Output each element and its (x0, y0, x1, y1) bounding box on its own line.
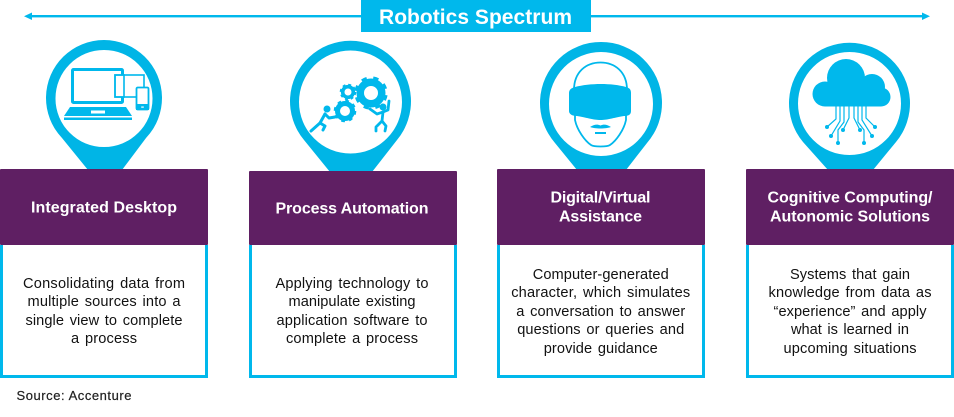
icon: people pushing gears (311, 76, 389, 131)
heading: process automation: Process Automation (276, 200, 428, 217)
large gear (354, 76, 388, 110)
panel: integrated desktop (0, 40, 208, 377)
icon: cloud with circuits (812, 59, 890, 145)
description: process automation: manipulate existing (288, 294, 416, 310)
body box: process automation (250, 245, 456, 376)
panel: cognitive computing (746, 43, 954, 377)
description: integrated desktop (23, 276, 185, 347)
body box: cognitive computing (748, 245, 952, 376)
small gear (341, 85, 355, 99)
description: process automation: complete a process (286, 331, 418, 347)
panel: process automation (249, 41, 457, 376)
heading: integrated desktop: Integrated Desktop (31, 200, 177, 217)
description: process automation: Applying technology to (276, 276, 428, 292)
heading: digital virtual assistance: Digital/Virtual (550, 190, 650, 207)
description: process automation: application software to (276, 313, 428, 329)
right person (370, 101, 389, 131)
description: integrated desktop: a process (71, 331, 137, 347)
description: cognitive computing: knowledge from data as (768, 285, 932, 301)
title: Robotics Spectrum (379, 6, 572, 29)
icon: laptop and devices (64, 70, 149, 120)
header: cognitive computing (746, 169, 954, 245)
header: digital virtual assistance (497, 169, 705, 245)
description: integrated desktop: single view to complete (26, 313, 182, 329)
icon: virtual reality headset (569, 62, 631, 146)
medium gear (335, 101, 355, 121)
description: cognitive computing (768, 267, 932, 357)
description: cognitive computing: Systems that gain (790, 267, 910, 283)
spectrum arrow (24, 12, 930, 20)
source note: Source: Accenture (16, 388, 132, 403)
heading: digital virtual assistance (550, 190, 650, 226)
description: cognitive computing: what is learned in (790, 322, 909, 338)
description: digital virtual assistance (511, 267, 690, 357)
pin: integrated desktop (46, 40, 162, 170)
title (361, 0, 591, 32)
heading: cognitive computing (768, 190, 933, 226)
pin: process automation (290, 41, 411, 172)
pin: digital virtual assistance (540, 42, 662, 170)
description: cognitive computing: upcoming situations (784, 341, 916, 357)
pin: cognitive computing (789, 43, 910, 170)
description: integrated desktop: multiple sources into a (28, 294, 181, 310)
header: integrated desktop (0, 169, 208, 245)
header: process automation (249, 171, 457, 245)
description: digital virtual assistance: questions or queries and (517, 322, 684, 338)
description: process automation (276, 276, 428, 347)
description: digital virtual assistance: provide guidance (544, 341, 658, 357)
description: integrated desktop: Consolidating data from (23, 276, 185, 292)
description: digital virtual assistance: Computer-generated (533, 267, 669, 283)
body box: digital virtual assistance (498, 245, 704, 376)
body box: integrated desktop (2, 245, 206, 376)
heading: cognitive computing: Cognitive Computing/ (768, 190, 933, 207)
panel: digital virtual assistance (497, 42, 705, 376)
description: cognitive computing: “experience” and apply (774, 304, 927, 320)
description: digital virtual assistance: a conversation to answer (516, 304, 685, 320)
left person (311, 106, 335, 131)
heading: digital virtual assistance: Assistance (559, 209, 642, 226)
heading: cognitive computing: Autonomic Solutions (770, 209, 930, 226)
description: digital virtual assistance: character, which simulates (511, 285, 690, 301)
